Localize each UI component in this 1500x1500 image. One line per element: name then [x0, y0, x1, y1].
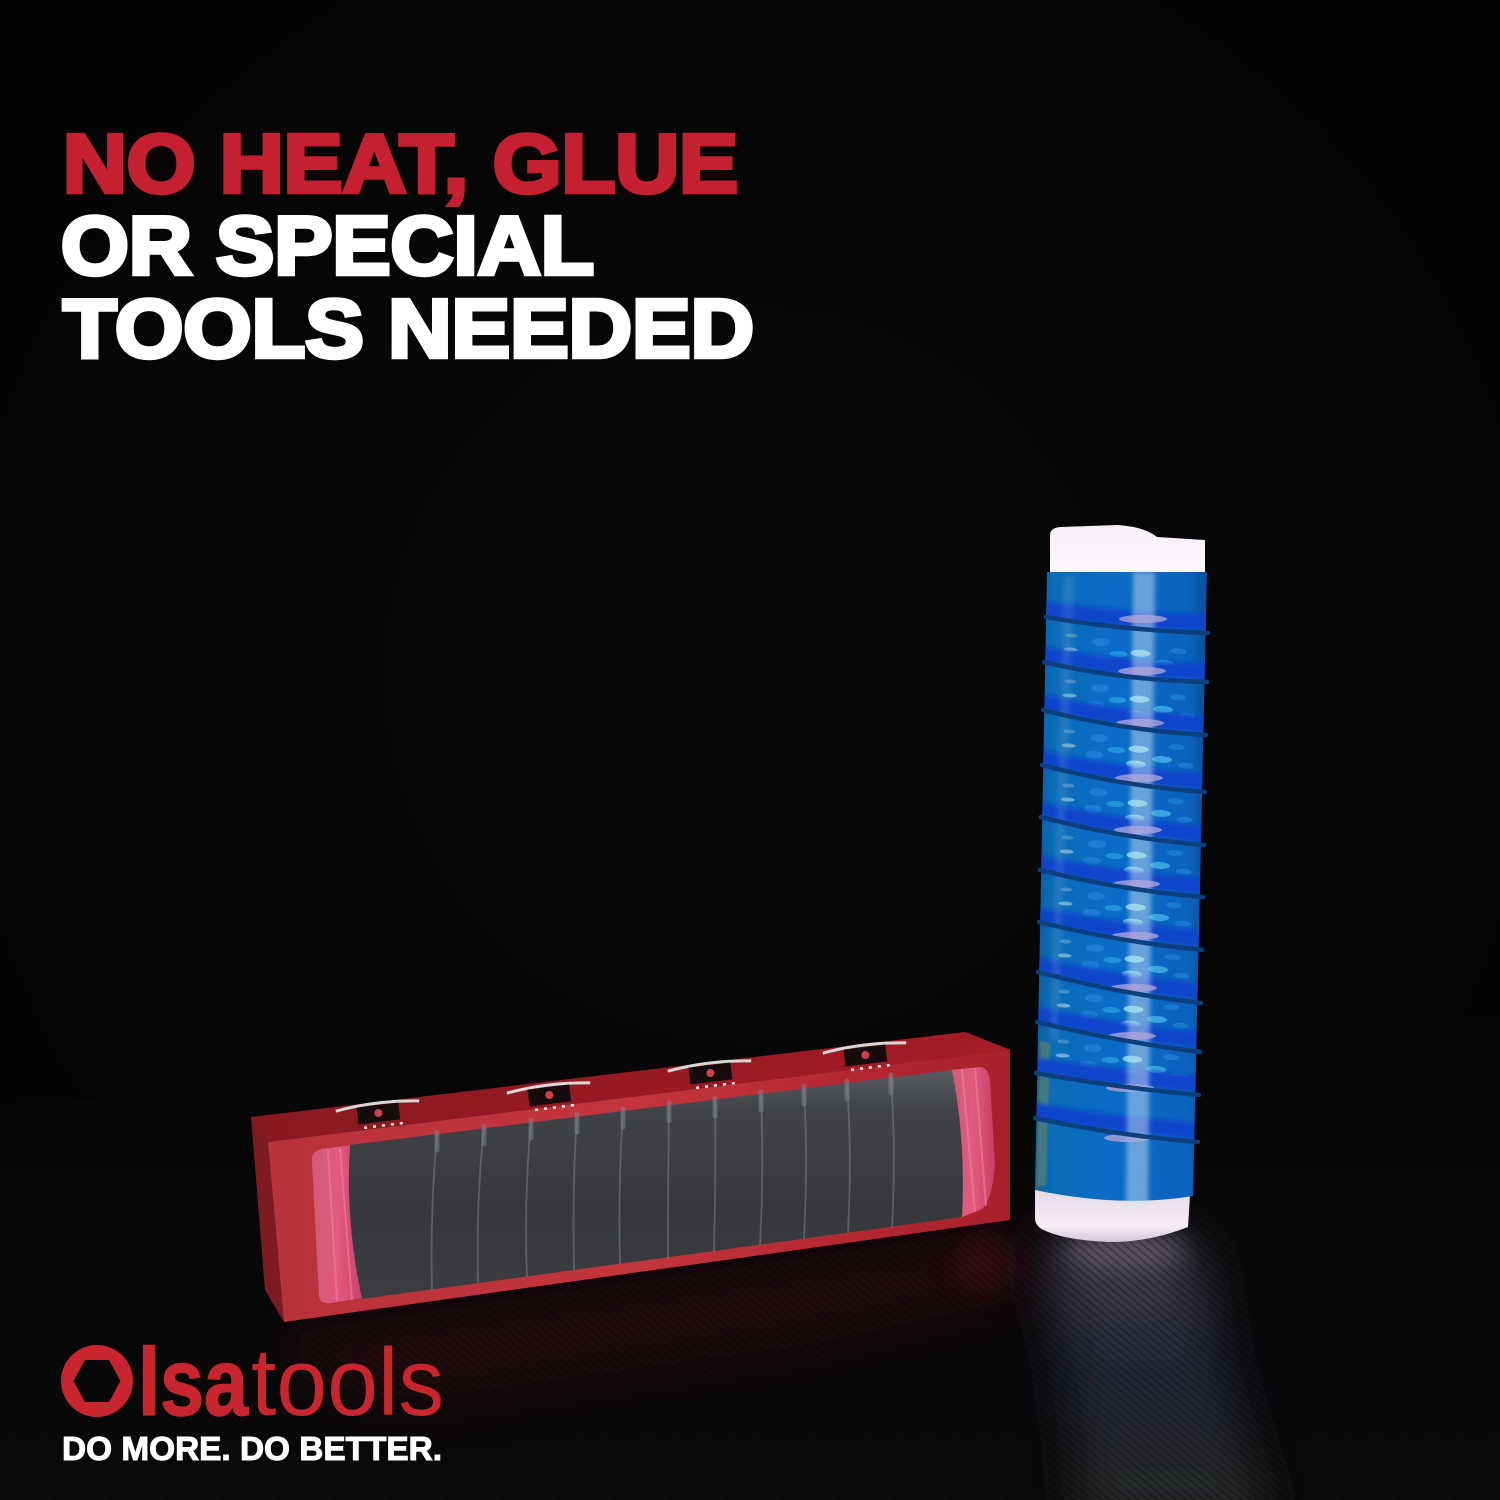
- rib highlights on central column: [1104, 615, 1167, 1142]
- greenish left edge reflection: [1036, 1040, 1050, 1188]
- box top labels: [335, 1040, 909, 1131]
- red glow near box corner: [953, 1230, 1017, 1294]
- logo hex O mark: [61, 1345, 133, 1417]
- heading line 2 white: OR SPECIAL: [61, 199, 594, 292]
- box top face: [251, 1032, 1011, 1142]
- sleeve rib lines: [432, 1077, 894, 1290]
- helical ribs: [1030, 572, 1215, 1204]
- tube texture blobs: [1055, 633, 1197, 1081]
- red reflection under box: [300, 1235, 1015, 1400]
- box window dark sleeve: [349, 1070, 963, 1299]
- bright spot under tube: [1063, 1232, 1187, 1268]
- central vertical highlight: [1126, 572, 1155, 1204]
- rib lines: [1035, 617, 1208, 1142]
- box window right pink end: [950, 1067, 995, 1218]
- red product box: [251, 1032, 1011, 1322]
- tube top white liner: [1050, 525, 1205, 574]
- logo wordmark thin part: tools: [251, 1329, 444, 1436]
- tagline: DO MORE. DO BETTER.: [62, 1430, 442, 1467]
- logo wordmark bold part: lsa: [138, 1329, 249, 1436]
- floor weave texture: [0, 1200, 1500, 1500]
- rib saturated shadows: [1030, 609, 1215, 1132]
- infographic canvas: [61, 132, 1296, 1500]
- box front face: [268, 1050, 1010, 1322]
- box left end face: [251, 1117, 284, 1322]
- floor surface: [0, 1016, 1500, 1500]
- blue tube product: [1030, 525, 1215, 1242]
- label 3: [667, 1058, 754, 1091]
- left pink end ridges: [328, 1148, 352, 1300]
- heading line 3 white: TOOLS NEEDED: [63, 282, 754, 375]
- tube blue body: [1035, 572, 1207, 1201]
- right pink end ridges: [962, 1068, 986, 1212]
- tube bottom white liner: [1035, 1188, 1190, 1242]
- left vertical highlight: [1050, 576, 1074, 1040]
- sleeve rib top bulges: [437, 1075, 891, 1150]
- light reflection on floor: [1045, 1240, 1272, 1500]
- heading line 1 red: NO HEAT, GLUE: [63, 117, 738, 210]
- label 2: [506, 1080, 593, 1113]
- heading: [61, 117, 754, 375]
- logo: [61, 1329, 444, 1467]
- label 1: [335, 1098, 422, 1131]
- label 4: [822, 1040, 909, 1073]
- box window left pink end: [312, 1145, 364, 1303]
